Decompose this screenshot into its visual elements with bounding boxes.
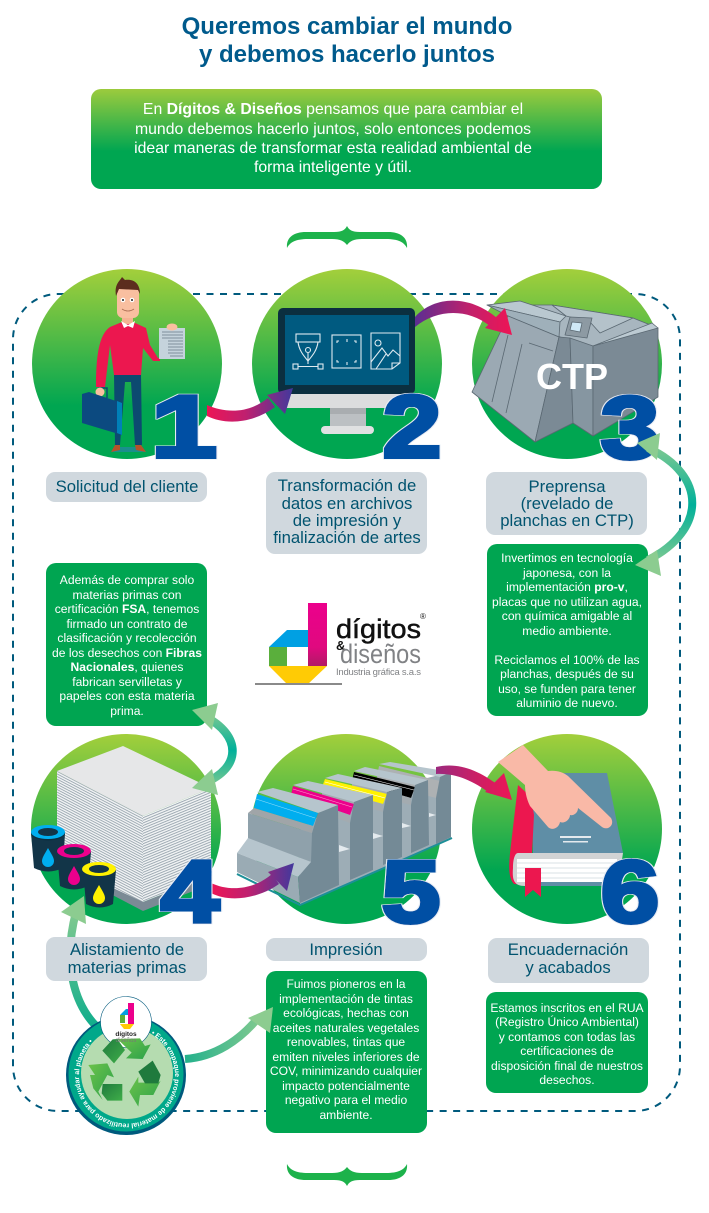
panel: impresión note: COV, minimizando cualquier	[270, 1064, 422, 1078]
numeral 2: 2	[383, 377, 441, 476]
panel: impresión note: emiten niveles inferiores de	[272, 1050, 420, 1064]
panel: impresión note: negativo para el medio	[285, 1093, 407, 1107]
panel: preprensa note: placas que no utilizan agua,	[492, 595, 642, 609]
label: step 2	[266, 472, 427, 554]
panel: preprensa note: planchas, después de su	[500, 667, 634, 681]
label: step 3	[486, 472, 647, 535]
panel: intro: En Dígitos & Diseños pensamos que para cambiar el	[143, 101, 523, 118]
panel: impresión note: Fuimos pioneros en la	[287, 977, 406, 991]
icon: bottom brace	[287, 1164, 407, 1186]
numeral 3: 3	[601, 378, 659, 477]
panel: impresión note: impacto potencialmente	[282, 1079, 410, 1093]
logo: dígitos & diseños: ®	[420, 612, 426, 621]
panel: materias primas note: materias primas con	[73, 588, 181, 602]
panel: acabados note: certificaciones de	[520, 1044, 614, 1058]
label: step 1: Solicitud del cliente	[56, 477, 198, 496]
label: step 2: de impresión y	[293, 511, 402, 530]
label: step 4: materias primas	[68, 958, 186, 977]
panel: impresión note: ambiente.	[319, 1108, 373, 1122]
panel: materias primas note: papeles con esta materia	[59, 689, 195, 703]
circle: step 6	[472, 734, 662, 924]
logo: small: dígitos	[115, 1031, 137, 1038]
panel: impresión note: renovables, tintas que	[287, 1035, 405, 1049]
arrow: step 4 to 5	[211, 863, 294, 898]
text: CTP: CTP	[536, 356, 608, 397]
numeral 4: 4	[161, 842, 219, 941]
panel: acabados note: disposición final de nuestros	[491, 1059, 643, 1073]
panel: materias primas note: firmado un contrato de	[66, 617, 188, 631]
panel: acabados note	[486, 992, 648, 1093]
label: step 3: (revelado de	[521, 494, 613, 513]
icon: recycling arrows	[88, 1038, 161, 1107]
label: step 2: Transformación de	[278, 476, 416, 495]
label: step 3: Preprensa	[528, 477, 606, 496]
label: step 1	[46, 472, 207, 502]
label: step 6	[488, 938, 649, 983]
circle: step 3	[472, 269, 662, 459]
panel: preprensa note	[487, 544, 648, 716]
title: Queremos cambiar el mundo	[182, 13, 512, 40]
label: step 2: finalización de artes	[273, 528, 421, 547]
arrow: step 3 and note	[635, 433, 692, 576]
numeral 5: 5	[382, 842, 440, 941]
panel: preprensa note: implementación pro-v,	[506, 580, 628, 594]
logo: dígitos & diseños: diseños	[340, 639, 421, 669]
panel: materias primas note: de los desechos con Fibras	[52, 646, 202, 660]
circle: step 1	[32, 269, 222, 459]
panel: impresión note	[266, 971, 427, 1133]
panel: materias primas note: Además de comprar solo	[60, 573, 194, 587]
label: step 5	[266, 938, 427, 961]
label: step 6: y acabados	[525, 958, 611, 977]
panel: materias primas note: fabrican servilletas y	[72, 675, 183, 689]
panel: materias primas note: prima.	[110, 704, 144, 718]
panel: preprensa note: uso, se funden para tener	[498, 682, 636, 696]
logo: dígitos & diseños: dígitos	[336, 614, 421, 644]
logo: small	[115, 1003, 137, 1044]
panel: impresión note: ecológicas, hechas con	[283, 1006, 409, 1020]
panel: intro: mundo debemos hacerlo juntos, solo entonces podemos	[135, 121, 531, 138]
panel: impresión note: aceites naturales vegetales	[273, 1021, 419, 1035]
icon: man with briefcase	[82, 277, 185, 452]
icon: top brace	[287, 226, 407, 248]
panel: acabados note: (Registro Único Ambiental)	[495, 1014, 639, 1029]
logo: dígitos & diseños: &	[336, 638, 345, 653]
panel: intro: idear maneras de transformar esta realidad ambiental de	[134, 140, 532, 157]
circle: step 2	[252, 269, 442, 459]
circle: step 4	[31, 734, 221, 924]
label: step 3: planchas en CTP)	[500, 511, 634, 530]
panel: preprensa note: con química amigable al	[502, 609, 632, 623]
panel: materias primas note: certificación FSA, tenemos	[55, 602, 199, 616]
label: step 4	[46, 937, 207, 981]
ring text: • Este empaque proviene de material reutilizado para ayudar al planeta •	[74, 1032, 179, 1128]
panel: intro: forma inteligente y útil.	[254, 159, 412, 176]
icon: monitor	[278, 308, 415, 434]
title	[182, 13, 512, 68]
label: step 4: Alistamiento de	[70, 940, 184, 959]
label: step 2: datos en archivos	[282, 494, 412, 513]
icon: printing press	[237, 762, 452, 905]
logo: small: diseños	[116, 1038, 136, 1044]
arrow: recycling to step 4	[61, 896, 97, 1027]
icon: CTP machine	[472, 301, 658, 442]
arrow: step 2 to 3	[415, 301, 512, 335]
numeral 6: 6	[601, 842, 659, 941]
panel: acabados note: desechos.	[539, 1073, 595, 1087]
panel: acabados note: y contamos con todas las	[499, 1030, 635, 1044]
panel: preprensa note: aluminio de nuevo.	[516, 696, 618, 710]
badge: recycling	[66, 996, 186, 1135]
panel: acabados note: Estamos inscritos en el RUA	[490, 1001, 645, 1015]
circle: step 5	[251, 734, 441, 924]
icon: ink jars	[31, 825, 116, 908]
logo: dígitos & diseños: Industria gráfica s.a.s	[336, 667, 421, 678]
logo: dígitos & diseños	[255, 603, 426, 685]
arrow: step 5 to 6	[436, 766, 512, 800]
label: step 5: Impresión	[309, 940, 383, 959]
label: step 6: Encuadernación	[508, 940, 628, 959]
title: y debemos hacerlo juntos	[199, 41, 495, 68]
panel: materias primas note: clasificación y recolección	[57, 631, 197, 645]
panel: preprensa note: japonesa, con la	[522, 566, 611, 580]
arrow: step 1 to 2	[207, 388, 293, 422]
arrow: recycling to impresión	[185, 1007, 273, 1059]
panel: materias primas note: Nacionales, quienes	[71, 660, 183, 674]
panel: preprensa note: Invertimos en tecnología	[501, 551, 633, 565]
icon: paper stack	[57, 746, 211, 911]
icon: book and pointing hand	[498, 745, 623, 897]
panel: preprensa note: Reciclamos el 100% de las	[494, 653, 640, 667]
panel: impresión note: implementación de tintas	[279, 992, 413, 1006]
numeral 1: 1	[151, 378, 217, 476]
panel: intro	[91, 89, 602, 189]
panel: preprensa note: medio ambiente.	[522, 624, 612, 638]
arrow: note and step 4	[192, 703, 232, 795]
panel: materias primas note	[46, 563, 207, 726]
